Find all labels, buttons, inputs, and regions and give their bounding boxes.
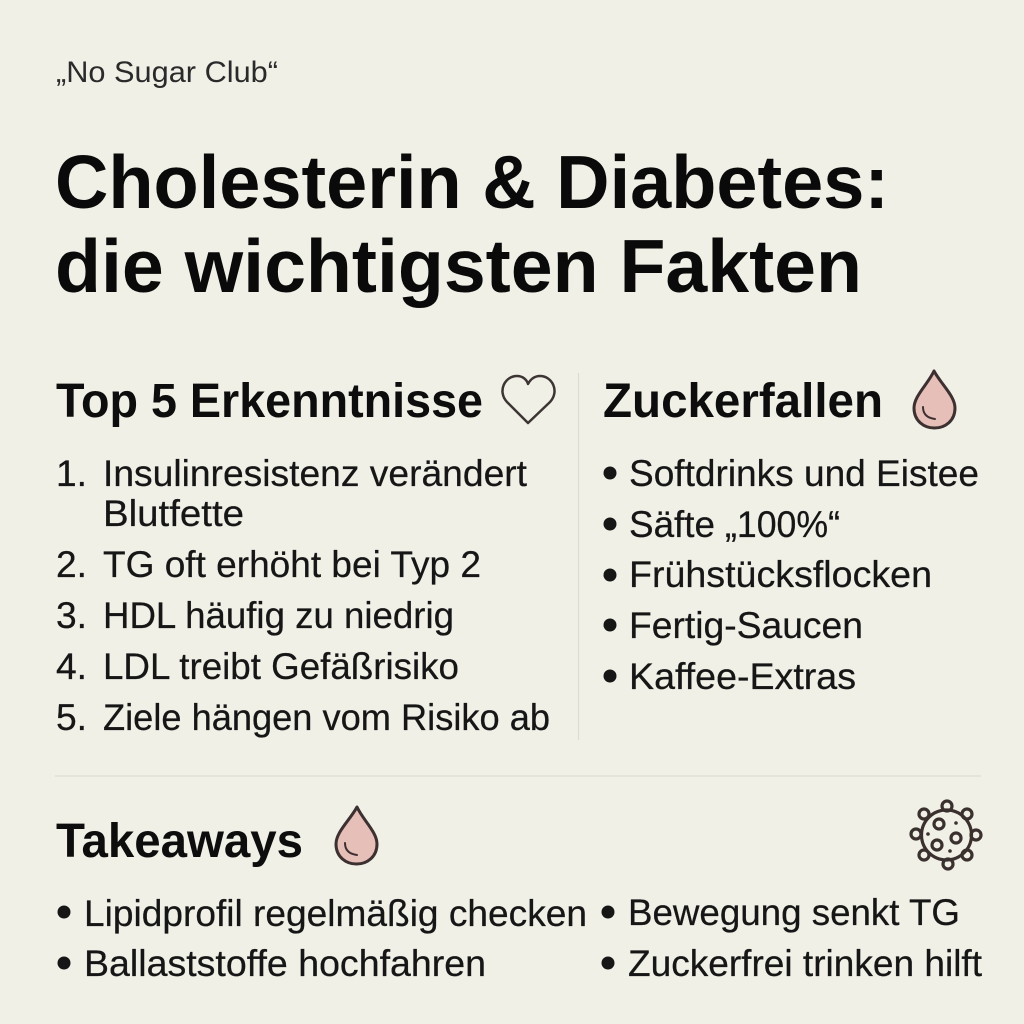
bullet list	[604, 453, 979, 697]
numbered list: 1.	[56, 453, 87, 494]
bullet list: Kaffee-Extras	[629, 656, 856, 697]
takeaways left column: Ballaststoffe hochfahren	[84, 943, 486, 984]
heading: Top 5 Erkenntnisse: Top 5 Erkenntnisse	[56, 375, 483, 428]
heading: Takeaways: Takeaways	[56, 815, 303, 868]
bullet list: Fertig-Saucen	[629, 605, 863, 646]
numbered list: Ziele hängen vom Risiko ab	[103, 697, 550, 738]
panel: Top 5 Erkenntnisse	[56, 375, 555, 738]
takeaways right column	[602, 892, 983, 984]
numbered list: HDL häufig zu niedrig	[103, 595, 454, 636]
bullet list: Säfte	[629, 504, 715, 545]
numbered list: 3.	[56, 595, 87, 636]
panel: Zuckerfallen	[603, 371, 979, 697]
bullet list: „100%“	[725, 504, 840, 545]
title: die wichtigsten Fakten	[55, 224, 862, 308]
numbered list: Blutfette	[103, 493, 244, 534]
takeaways left column: Lipidprofil regelmäßig checken	[84, 893, 587, 934]
takeaways right column: Zuckerfrei trinken hilft	[628, 943, 983, 984]
numbered list: Insulinresistenz verändert	[103, 453, 528, 494]
numbered list: LDL treibt Gefäßrisiko	[103, 646, 459, 687]
numbered list	[56, 453, 550, 738]
icon: blood drop	[914, 371, 955, 428]
numbered list: TG oft erhöht bei Typ 2	[103, 544, 481, 585]
brand label: „No Sugar Club“	[56, 56, 278, 89]
numbered list: 4.	[56, 646, 87, 687]
icon: blood drop	[336, 807, 377, 864]
title	[55, 140, 889, 308]
icon: heart	[502, 376, 555, 423]
numbered list: 2.	[56, 544, 87, 585]
panel: Takeaways	[56, 801, 983, 984]
heading: Zuckerfallen: Zuckerfallen	[603, 375, 883, 428]
bullet list: Softdrinks und Eistee	[629, 453, 979, 494]
icon: cell	[911, 801, 981, 869]
takeaways right column: Bewegung senkt TG	[628, 892, 960, 933]
takeaways left column	[58, 893, 587, 984]
numbered list: 5.	[56, 697, 87, 738]
title: Cholesterin & Diabetes:	[55, 140, 889, 224]
bullet list: Frühstücksflocken	[629, 554, 932, 595]
